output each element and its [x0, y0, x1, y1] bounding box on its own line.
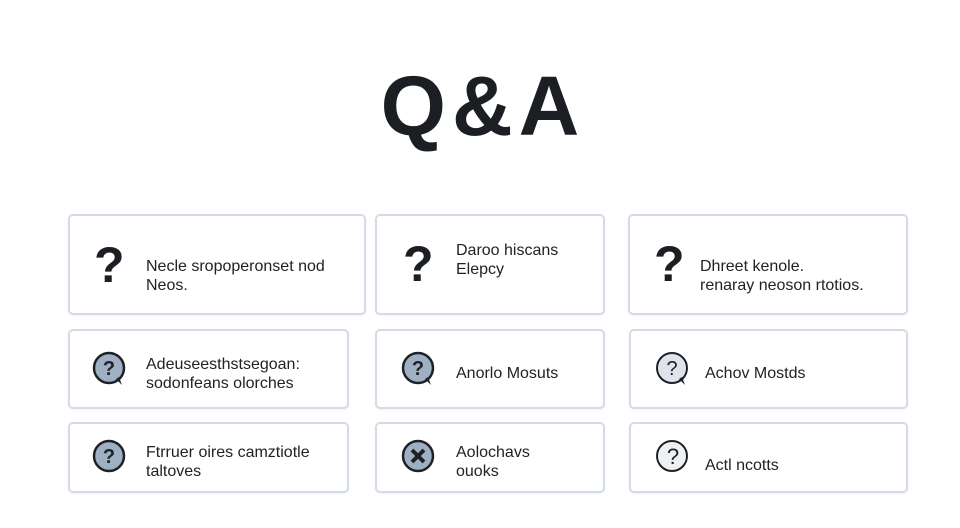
text: Neos. [146, 277, 188, 294]
text [456, 444, 530, 480]
icon: speech question [92, 352, 126, 385]
card: row2 col2 [375, 329, 605, 409]
text: Necle sropoperonset nod [146, 258, 325, 275]
icon: speech question light: ? [666, 358, 678, 380]
text [146, 356, 300, 392]
icon: speech question light [656, 352, 688, 385]
text [456, 242, 558, 278]
text: sodonfeans olorches [146, 375, 294, 392]
card: row2 col3 [629, 329, 908, 409]
icon: circle cross [402, 440, 434, 472]
icon: speech question: ? [103, 358, 115, 380]
text: Aolochavs [456, 444, 530, 461]
card: row3 col2 [375, 422, 605, 493]
text: Ftrruer oires camztiotle [146, 444, 310, 461]
card: row3 col1 [68, 422, 349, 493]
icon: speech question: ? [412, 358, 424, 380]
text: Achov Mostds [705, 365, 805, 382]
icon: question mark: ? [403, 236, 434, 292]
text: Actl ncotts [705, 457, 779, 474]
icon: circle question: ? [103, 446, 115, 468]
text: taltoves [146, 463, 201, 480]
title: Q&A [381, 59, 585, 153]
text: Elepcy [456, 261, 504, 278]
icon: speech question [402, 352, 434, 385]
text: renaray neoson rtotios. [700, 277, 864, 294]
icon: circle question [92, 440, 126, 472]
card: row2 col1 [68, 329, 349, 409]
text [146, 444, 310, 480]
text: Daroo hiscans [456, 242, 558, 259]
icon: circle check: ? [667, 444, 679, 469]
text: ouoks [456, 463, 499, 480]
card: row1 col2 [375, 214, 605, 315]
text: Anorlo Mosuts [456, 365, 558, 382]
card: row1 col1 [68, 214, 366, 315]
icon: question mark: ? [654, 236, 685, 292]
text: Adeuseesthstsegoan: [146, 356, 300, 373]
text: Dhreet kenole. [700, 258, 804, 275]
text [700, 258, 864, 294]
icon: question mark: ? [94, 237, 125, 293]
card: row3 col3 [629, 422, 908, 493]
text [146, 258, 325, 294]
card: row1 col3 [628, 214, 908, 315]
icon: circle check [656, 440, 688, 472]
